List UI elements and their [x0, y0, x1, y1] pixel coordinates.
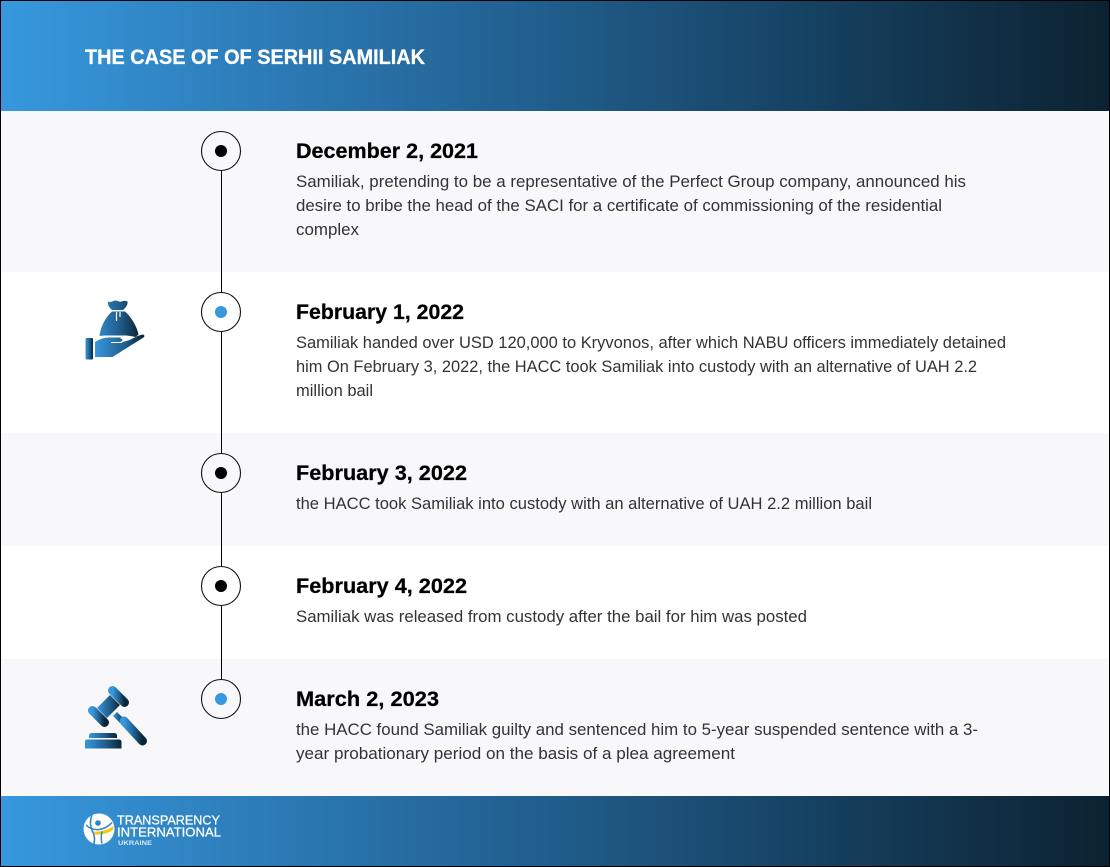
entry: March 2, 2023 — [296, 687, 978, 763]
entry: February 3, 2022: the HACC took Samiliak into custody with an alternative of UAH 2.2 million bail — [296, 495, 872, 513]
entry: February 1, 2022 — [296, 300, 1006, 400]
band: February 3 2022 — [1, 433, 1109, 546]
entry: February 4, 2022: February 4, 2022 — [296, 574, 467, 598]
entry: February 1, 2022: Samiliak handed over USD 120,000 to Kryvonos, after which NABU officers immediately detained — [296, 334, 1006, 352]
entry: February 1, 2022: him On February 3, 2022, the HACC took Samiliak into custody with an alternative of UAH 2.2 — [296, 358, 977, 376]
entry: February 1, 2022: million bail — [296, 382, 373, 400]
entry: March 2, 2023: year probationary period on the basis of a plea agreement — [296, 745, 735, 763]
entry: December 2, 2021 — [296, 139, 966, 239]
entry: December 2, 2021: Samiliak, pretending to be a representative of the Perfect Group company, announced his — [296, 173, 966, 191]
logo wordmark: TRANSPARENCY — [117, 812, 220, 828]
entry: February 3, 2022 — [296, 461, 872, 513]
entry: February 4, 2022: Samiliak was released from custody after the bail for him was posted — [296, 608, 807, 626]
timeline marker: December 2021 — [202, 132, 240, 170]
band: March 2023 — [1, 659, 1109, 796]
band: December 2021 — [1, 111, 1109, 272]
timeline marker: March 2023 — [202, 680, 240, 718]
band: February 4 2022 — [1, 546, 1109, 659]
entry: December 2, 2021: desire to bribe the head of the SACI for a certificate of commissioning of the residential — [296, 197, 942, 215]
logo: Transparency International Ukraine: UKRAINE — [118, 840, 153, 847]
timeline marker: February 4 2022 — [202, 566, 240, 606]
entry: February 3, 2022: February 3, 2022 — [296, 461, 467, 485]
band: February 1 2022 — [1, 272, 1109, 433]
icon: money bag on hand — [86, 300, 144, 360]
title: THE CASE OF OF SERHII SAMILIAK — [85, 45, 425, 69]
timeline marker: February 3 2022 — [202, 454, 240, 492]
logo emblem — [84, 814, 114, 844]
logo: Transparency International Ukraine: INTERNATIONAL — [117, 824, 221, 840]
entry: December 2, 2021: December 2, 2021 — [296, 139, 478, 163]
timeline line — [220, 150, 222, 698]
entry: December 2, 2021: complex — [296, 221, 360, 239]
timeline marker: February 1 2022 — [202, 292, 240, 332]
entry: March 2, 2023: the HACC found Samiliak guilty and sentenced him to 5-year suspended sentence with a 3- — [296, 721, 978, 739]
footer banner — [1, 796, 1109, 866]
entry: March 2, 2023: March 2, 2023 — [296, 687, 439, 711]
header banner — [1, 1, 1109, 111]
logo: Transparency International Ukraine — [84, 812, 221, 847]
icon: judge gavel — [85, 690, 142, 748]
entry: February 1, 2022: February 1, 2022 — [296, 300, 464, 324]
entry: February 4, 2022 — [296, 574, 807, 626]
